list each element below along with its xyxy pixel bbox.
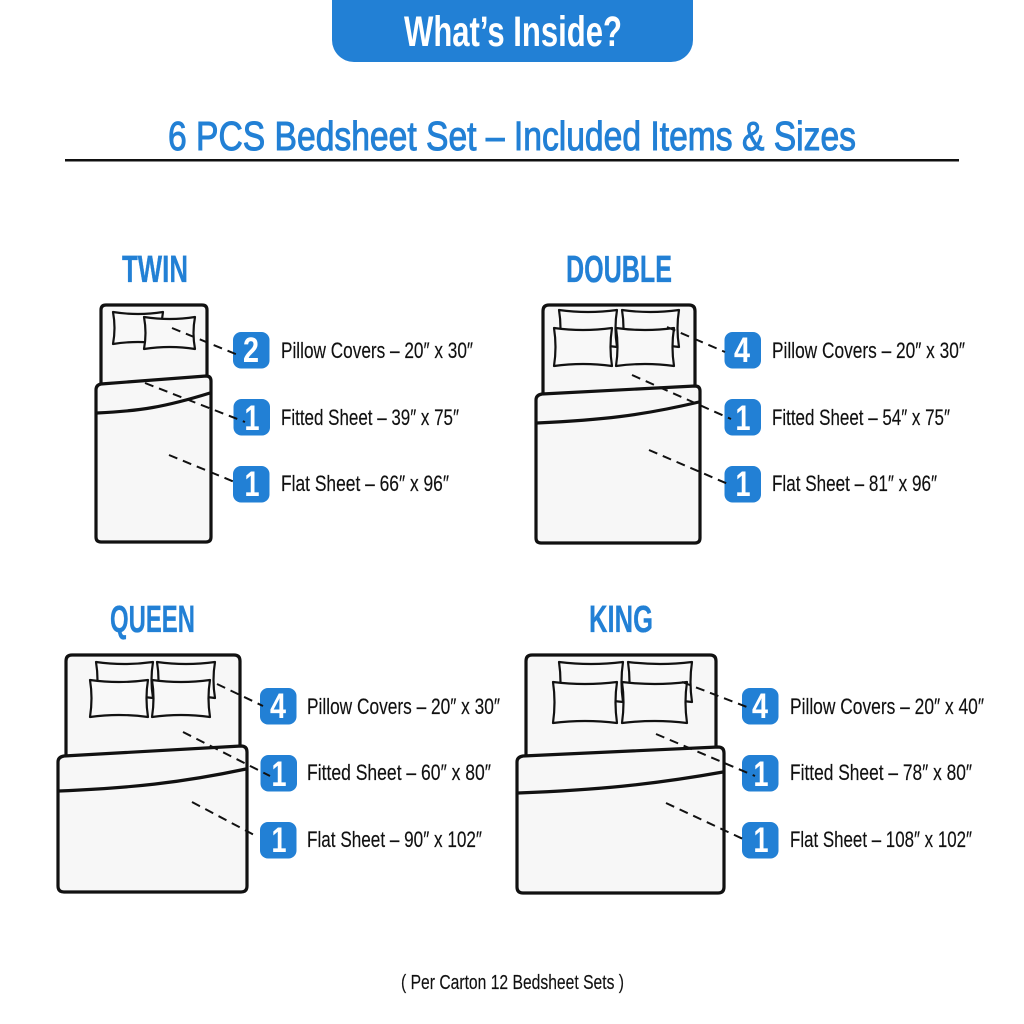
- item: fitted sheet: [234, 399, 459, 438]
- bed illustration: king: [517, 655, 724, 893]
- item: pillow covers: 4: [270, 687, 286, 726]
- item: fitted sheet: Fitted Sheet – 54″ x 75″: [772, 405, 950, 430]
- item: pillow covers: Pillow Covers – 20″ x 30″: [772, 338, 965, 363]
- leader lines: twin: [145, 328, 245, 483]
- footer note: ( Per Carton 12 Bedsheet Sets ): [401, 972, 624, 994]
- item: fitted sheet: 1: [244, 399, 260, 438]
- item: flat sheet: [724, 465, 937, 504]
- heading: queen: QUEEN: [110, 599, 195, 641]
- leader lines: double: [632, 327, 731, 484]
- bed illustration: twin: [96, 305, 211, 542]
- item: fitted sheet: [724, 399, 950, 438]
- heading: king: KING: [589, 599, 653, 641]
- item: pillow covers: [233, 331, 473, 370]
- panel: king: [517, 599, 984, 893]
- item: flat sheet: Flat Sheet – 81″ x 96″: [772, 471, 937, 496]
- item: pillow covers: 2: [243, 331, 259, 370]
- item: flat sheet: 1: [244, 465, 260, 504]
- item: fitted sheet: [742, 755, 972, 794]
- item: fitted sheet: 1: [736, 399, 750, 438]
- heading: double: DOUBLE: [566, 249, 672, 291]
- item: fitted sheet: [260, 755, 491, 794]
- panel: queen: [58, 599, 500, 892]
- item: flat sheet: [742, 821, 972, 860]
- item: flat sheet: Flat Sheet – 108″ x 102″: [790, 827, 972, 852]
- title: 6 PCS Bedsheet Set – Included Items & Sizes: [168, 113, 856, 159]
- header tab: What's Inside?: What’s Inside?: [404, 8, 622, 56]
- item: flat sheet: Flat Sheet – 90″ x 102″: [307, 827, 482, 852]
- item: fitted sheet: 1: [754, 755, 768, 794]
- leader lines: queen: [183, 684, 270, 837]
- item: flat sheet: [260, 821, 482, 860]
- heading: twin: TWIN: [122, 249, 188, 291]
- item: pillow covers: [742, 687, 984, 726]
- item: pillow covers: 4: [752, 687, 768, 726]
- item: flat sheet: 1: [754, 821, 768, 860]
- item: fitted sheet: Fitted Sheet – 39″ x 75″: [281, 405, 459, 430]
- item: fitted sheet: Fitted Sheet – 78″ x 80″: [790, 760, 972, 785]
- header tab: What's Inside?: [332, 0, 693, 62]
- item: fitted sheet: Fitted Sheet – 60″ x 80″: [307, 760, 491, 785]
- item: pillow covers: [724, 331, 965, 370]
- item: pillow covers: Pillow Covers – 20″ x 30″: [307, 694, 500, 719]
- item: fitted sheet: 1: [272, 755, 286, 794]
- item: flat sheet: Flat Sheet – 66″ x 96″: [281, 471, 449, 496]
- item: pillow covers: Pillow Covers – 20″ x 30″: [281, 338, 473, 363]
- leader lines: king: [656, 682, 755, 839]
- bed illustration: queen: [58, 655, 247, 892]
- panel: twin: [96, 249, 473, 542]
- item: flat sheet: 1: [736, 465, 750, 504]
- item: flat sheet: [233, 465, 449, 504]
- item: pillow covers: [260, 687, 500, 726]
- item: flat sheet: 1: [272, 821, 286, 860]
- bed illustration: double: [536, 305, 700, 543]
- panel: double: [536, 249, 965, 543]
- item: pillow covers: 4: [734, 331, 750, 370]
